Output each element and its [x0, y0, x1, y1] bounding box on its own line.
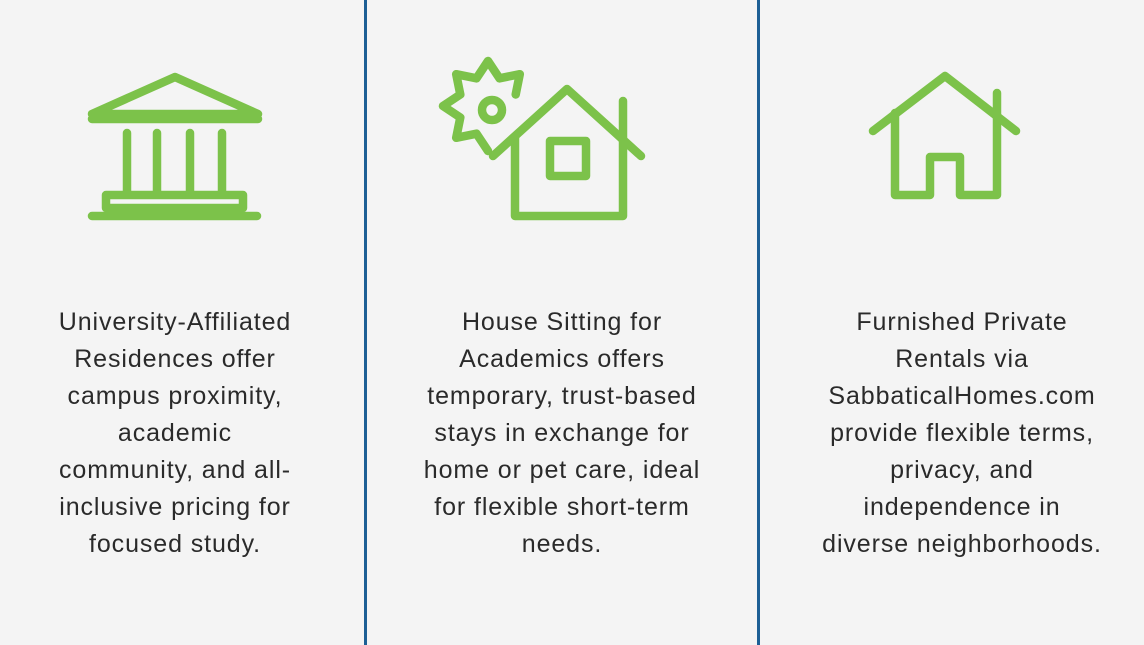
text: furnished rentals: SabbaticalHomes.com	[828, 382, 1096, 410]
text: house sitting: Academics offers	[459, 345, 665, 373]
text: furnished rentals: Rentals via	[895, 345, 1029, 373]
icon: university building	[92, 77, 258, 216]
text: university residences	[59, 308, 291, 558]
text: furnished rentals	[822, 308, 1102, 558]
text: university residences: University-Affiliated	[59, 308, 291, 336]
text: university residences: campus proximity,	[68, 382, 282, 410]
text: university residences: community, and all-	[59, 456, 291, 484]
text: house sitting: temporary, trust-based	[427, 382, 697, 410]
text: university residences: focused study.	[89, 530, 261, 558]
text: house sitting: for flexible short-term	[434, 493, 690, 521]
icon: house with sun	[443, 61, 641, 216]
text: furnished rentals: Furnished Private	[856, 308, 1068, 336]
text: university residences: academic	[118, 419, 232, 447]
text: house sitting: stays in exchange for	[434, 419, 690, 447]
text: furnished rentals: provide flexible terms,	[830, 419, 1094, 447]
text: furnished rentals: independence in	[864, 493, 1060, 521]
text: furnished rentals: diverse neighborhoods.	[822, 530, 1102, 558]
text: house sitting	[424, 308, 700, 558]
text: university residences: inclusive pricing for	[59, 493, 291, 521]
text: furnished rentals: privacy, and	[890, 456, 1034, 484]
icon: house	[873, 76, 1016, 195]
text: house sitting: home or pet care, ideal	[424, 456, 700, 484]
text: house sitting: needs.	[522, 530, 602, 558]
text: university residences: Residences offer	[74, 345, 276, 373]
text: house sitting: House Sitting for	[462, 308, 662, 336]
